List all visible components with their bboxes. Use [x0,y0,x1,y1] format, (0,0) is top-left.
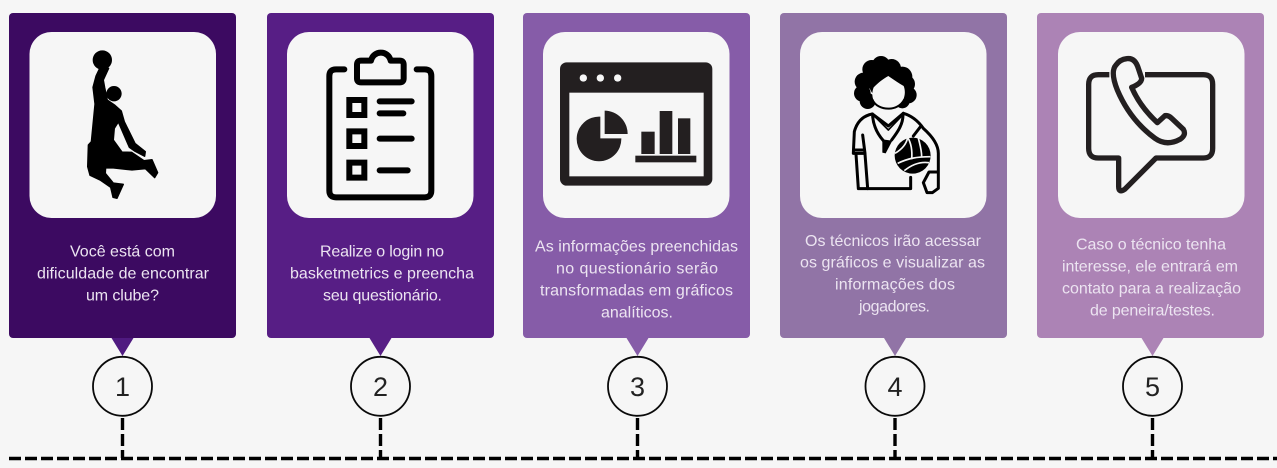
text: step 4: jogadores. [858,298,930,316]
text: step 4: Os técnicos irão acessar [805,233,982,250]
panel: step 1 [9,13,236,356]
timeline: dashed connector [9,418,1277,458]
number marker 4: 4 [887,372,903,402]
text: step 2 [290,244,474,304]
text: step 3: analíticos. [601,304,673,322]
text: step 1: um clube? [86,288,159,304]
text: step 5: de peneira/testes. [1090,302,1215,320]
text: step 4: informações dos [835,276,955,294]
icon: basketball player [88,51,158,198]
panel: step 2 [267,13,494,356]
text: step 3: no questionário serão [556,260,718,278]
text: step 1 [37,244,210,304]
number marker 5 [1123,357,1182,416]
number marker 5: 5 [1145,372,1160,402]
number marker 1: 1 [115,372,130,402]
icon: phone in speech bubble [1089,59,1213,191]
panel: step 3 [523,13,750,356]
number marker 3 [608,357,667,416]
panel: step 5 [1037,13,1264,356]
number marker 4 [866,357,924,416]
icon: coach with volleyball [853,56,938,193]
text: step 1: Você está com [70,244,175,260]
text: step 2: basketmetrics e preencha [290,266,474,282]
text: step 1: dificuldade de encontrar [37,266,210,282]
text: step 5: interesse, ele entrará em [1062,258,1238,276]
text: step 5: contato para a realização [1062,280,1241,298]
text: step 5: Caso o técnico tenha [1076,236,1226,254]
text: step 4: os gráficos e visualizar as [800,254,985,272]
text: step 2: Realize o login no [320,244,444,260]
number marker 2 [351,357,410,416]
text: step 3: transformadas em gráficos [540,282,733,300]
text: step 3 [535,238,738,322]
icon: clipboard checklist [329,53,431,197]
number marker 3: 3 [630,372,645,402]
text: step 2: seu questionário. [323,288,442,304]
number marker 1 [93,357,152,416]
text: step 5 [1062,236,1241,320]
text: step 4 [800,233,985,316]
number marker 2: 2 [373,372,388,402]
text: step 3: As informações preenchidas [535,238,738,256]
panel: step 4 [780,13,1007,356]
icon: analytics dashboard [560,62,712,186]
